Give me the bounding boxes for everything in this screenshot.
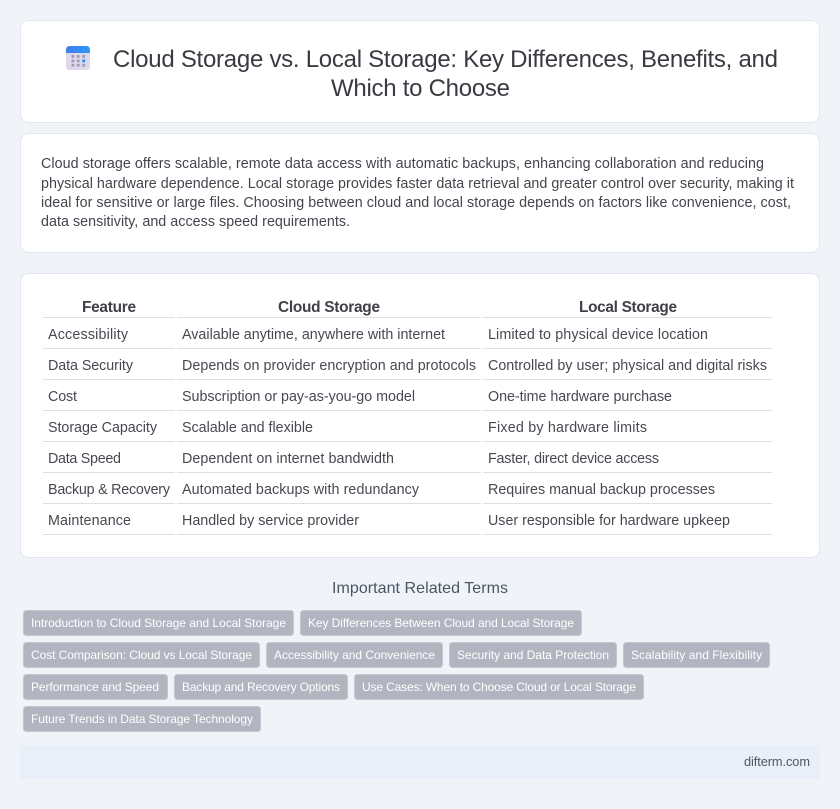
- row: cost: Cost: [48, 389, 77, 405]
- row: backup and recovery: Requires manual backup processes: [488, 482, 715, 498]
- text block: summary paragraph: Cloud storage offers scalable, remote data access with automatic backups, enhancing collaboration and reducing: [41, 156, 764, 172]
- row: maintenance: Handled by service provider: [182, 513, 359, 529]
- row: backup and recovery: [48, 482, 715, 498]
- tag: future trends: Future Trends in Data Storage Technology: [31, 712, 253, 726]
- tag: scalability: [624, 642, 770, 668]
- tag: cost comparison: [24, 642, 260, 668]
- row: data speed: [48, 451, 659, 467]
- text block: summary paragraph: ideal for sensitive or large files. Choosing between cloud and local storage depends on factors like convenience, cost,: [41, 195, 791, 211]
- tag: backup: [174, 674, 348, 700]
- panel: comparison table: [20, 274, 820, 558]
- tag: introduction: Introduction to Cloud Storage and Local Storage: [31, 616, 286, 630]
- table header: Cloud Storage: [278, 299, 380, 316]
- table header: Local Storage: [579, 299, 677, 316]
- row: data security: Data Security: [48, 358, 134, 374]
- table header: Feature: [82, 299, 136, 316]
- footer credit: difterm.com: [744, 754, 810, 769]
- row: storage capacity: Fixed by hardware limits: [488, 420, 647, 436]
- row: maintenance: User responsible for hardware upkeep: [488, 513, 730, 529]
- row: data security: Controlled by user; physical and digital risks: [488, 358, 767, 374]
- tag: accessibility: [266, 642, 442, 668]
- icon: storage grid: [66, 46, 90, 70]
- tag: key differences: [300, 610, 582, 636]
- tag: key differences: Key Differences Between Cloud and Local Storage: [308, 616, 574, 630]
- table header: [82, 299, 677, 316]
- text block: summary paragraph: physical hardware dependence. Local storage provides faster data retrieval and greater control over security, making it: [41, 176, 794, 192]
- row: maintenance: Maintenance: [48, 513, 131, 529]
- tag: backup: Backup and Recovery Options: [182, 680, 340, 694]
- title: [113, 46, 778, 102]
- tag: future trends: [24, 706, 260, 732]
- tag: use cases: Use Cases: When to Choose Cloud or Local Storage: [362, 680, 636, 694]
- row: data speed: Faster, direct device access: [488, 451, 659, 467]
- footer: [20, 745, 820, 779]
- title: Cloud Storage vs. Local Storage: Key Differences, Benefits, and: [113, 46, 778, 73]
- row: data speed: Data Speed: [48, 451, 121, 467]
- row: cost: Subscription or pay-as-you-go model: [182, 389, 415, 405]
- row: cost: [48, 389, 672, 405]
- panel: summary: [20, 134, 820, 252]
- text block: summary paragraph: data sensitivity, and access speed requirements.: [41, 214, 350, 230]
- tag: security: Security and Data Protection: [457, 648, 609, 662]
- row: accessibility: Limited to physical device location: [488, 327, 708, 343]
- row: storage capacity: Scalable and flexible: [182, 420, 313, 436]
- panel: header: [20, 20, 820, 122]
- tag: performance: [24, 674, 168, 700]
- row: data security: [48, 358, 767, 374]
- text block: summary paragraph: [41, 156, 794, 230]
- row: backup and recovery: Automated backups with redundancy: [182, 482, 420, 498]
- row: accessibility: [48, 327, 708, 343]
- heading: related terms: Important Related Terms: [332, 580, 508, 597]
- tag: security: [450, 642, 616, 668]
- row: maintenance: [48, 513, 730, 529]
- tag: performance: Performance and Speed: [31, 680, 159, 694]
- tag: use cases: [354, 674, 644, 700]
- row: data speed: Dependent on internet bandwidth: [182, 451, 394, 467]
- row: storage capacity: Storage Capacity: [48, 420, 158, 436]
- tag: scalability: Scalability and Flexibility: [631, 648, 762, 662]
- row: storage capacity: [48, 420, 647, 436]
- row: data security: Depends on provider encryption and protocols: [182, 358, 476, 374]
- row: backup and recovery: Backup & Recovery: [48, 482, 171, 498]
- tag: introduction: [24, 610, 294, 636]
- tag group: related terms: [24, 610, 770, 732]
- tag: cost comparison: Cost Comparison: Cloud vs Local Storage: [31, 648, 252, 662]
- tag: accessibility: Accessibility and Convenience: [274, 648, 435, 662]
- row: cost: One-time hardware purchase: [488, 389, 672, 405]
- row: accessibility: Accessibility: [48, 327, 129, 343]
- row: accessibility: Available anytime, anywhere with internet: [182, 327, 445, 343]
- title: Which to Choose: [331, 75, 510, 102]
